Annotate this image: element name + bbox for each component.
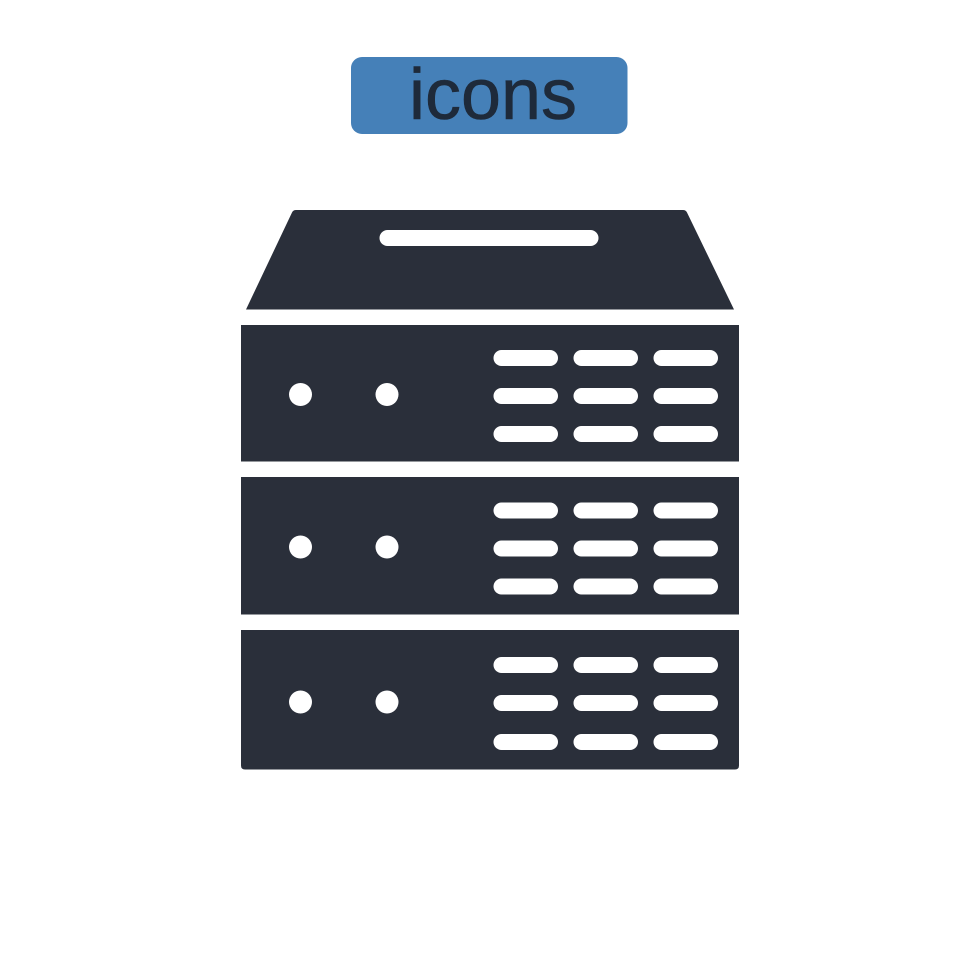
server top cover [246, 210, 734, 310]
icon: server rack [241, 210, 739, 770]
title text: icons [409, 55, 577, 135]
server unit 1 [241, 325, 739, 462]
badge background [351, 57, 628, 134]
server unit 2 [241, 477, 739, 614]
title badge [351, 55, 628, 135]
server unit 3 [241, 630, 739, 770]
